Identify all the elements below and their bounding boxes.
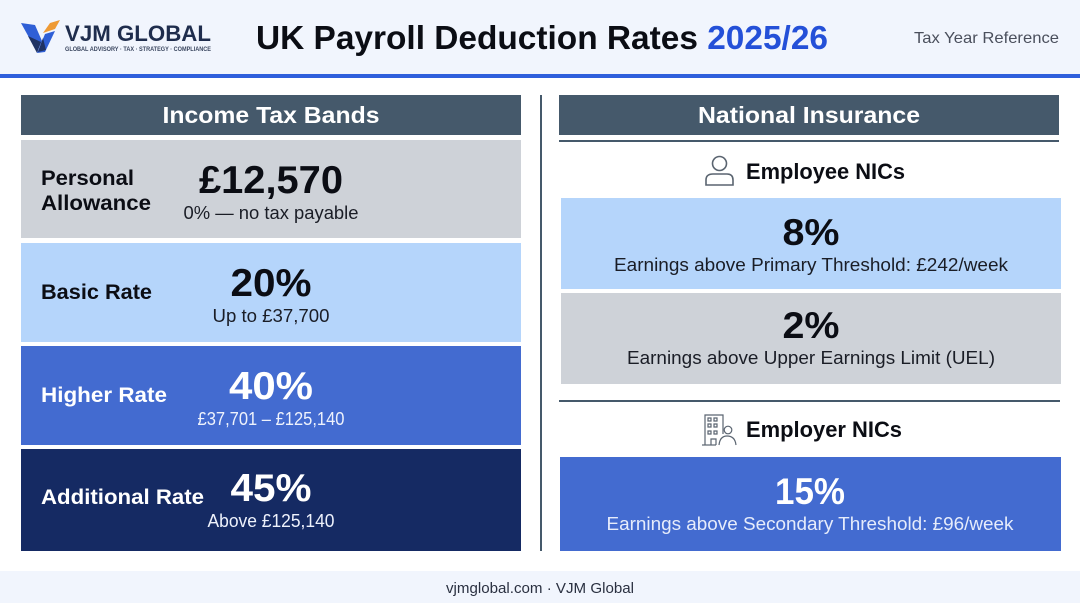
header band: [0, 0, 1080, 78]
card: employer 15%: 15%: [775, 471, 845, 512]
icon: office building and person: [702, 415, 736, 445]
band: higher rate: [21, 346, 521, 445]
card: employee 2%: 2%: [782, 305, 840, 346]
band: personal allowance: [21, 140, 521, 238]
icon: person: [706, 156, 733, 185]
band: higher rate: £37,701 – £125,140: [198, 409, 344, 429]
footer: [0, 571, 1080, 603]
heading: national insurance: National Insurance: [698, 102, 920, 128]
card: employer 15%: [560, 457, 1061, 551]
band: additional rate: Above £125,140: [208, 511, 334, 531]
band: personal allowance: 0% — no tax payable: [184, 203, 358, 223]
card: employer 15%: Earnings above Secondary Threshold: £96/week: [606, 514, 1015, 534]
icon: V mark: [21, 20, 60, 53]
heading: income tax bands: [21, 95, 521, 135]
band: basic rate: 20%: [230, 262, 312, 305]
band: higher rate: 40%: [229, 365, 313, 408]
band: basic rate: [21, 243, 521, 342]
band: higher rate: Higher Rate: [41, 384, 167, 407]
subheading: employee NICs: Employee NICs: [746, 159, 905, 184]
card: employee 8%: 8%: [782, 212, 840, 253]
subheading: employer NICs: Employer NICs: [746, 417, 902, 442]
band: basic rate: Basic Rate: [41, 281, 152, 304]
logo tagline: GLOBAL ADVISORY · TAX · STRATEGY · COMPLIANCE: [65, 47, 211, 53]
card: employee 2%: Earnings above Upper Earnings Limit (UEL): [627, 348, 995, 368]
band: personal allowance: Allowance: [41, 192, 151, 215]
tax year reference label: Tax Year Reference: [914, 30, 1059, 47]
band: additional rate: 45%: [230, 467, 312, 510]
logo wordmark: VJM GLOBAL: [65, 21, 211, 46]
card: employee 8%: Earnings above Primary Threshold: £242/week: [614, 255, 1009, 275]
logo: VJM Global: [21, 20, 211, 53]
card: employee 2%: [561, 293, 1061, 384]
heading: national insurance: [559, 95, 1059, 135]
heading: income tax bands: Income Tax Bands: [162, 102, 380, 128]
card: employee 8%: [561, 198, 1061, 289]
band: additional rate: Additional Rate: [41, 486, 204, 509]
title: UK Payroll Deduction Rates 2025/26: [256, 19, 828, 56]
band: additional rate: [21, 449, 521, 551]
panel: income tax bands: [21, 95, 521, 551]
footer: vjmglobal.com · VJM Global: [446, 580, 634, 597]
band: basic rate: Up to £37,700: [212, 306, 330, 326]
panel: national insurance: [559, 95, 1061, 551]
band: personal allowance: £12,570: [199, 159, 343, 202]
band: personal allowance: Personal: [41, 167, 134, 190]
